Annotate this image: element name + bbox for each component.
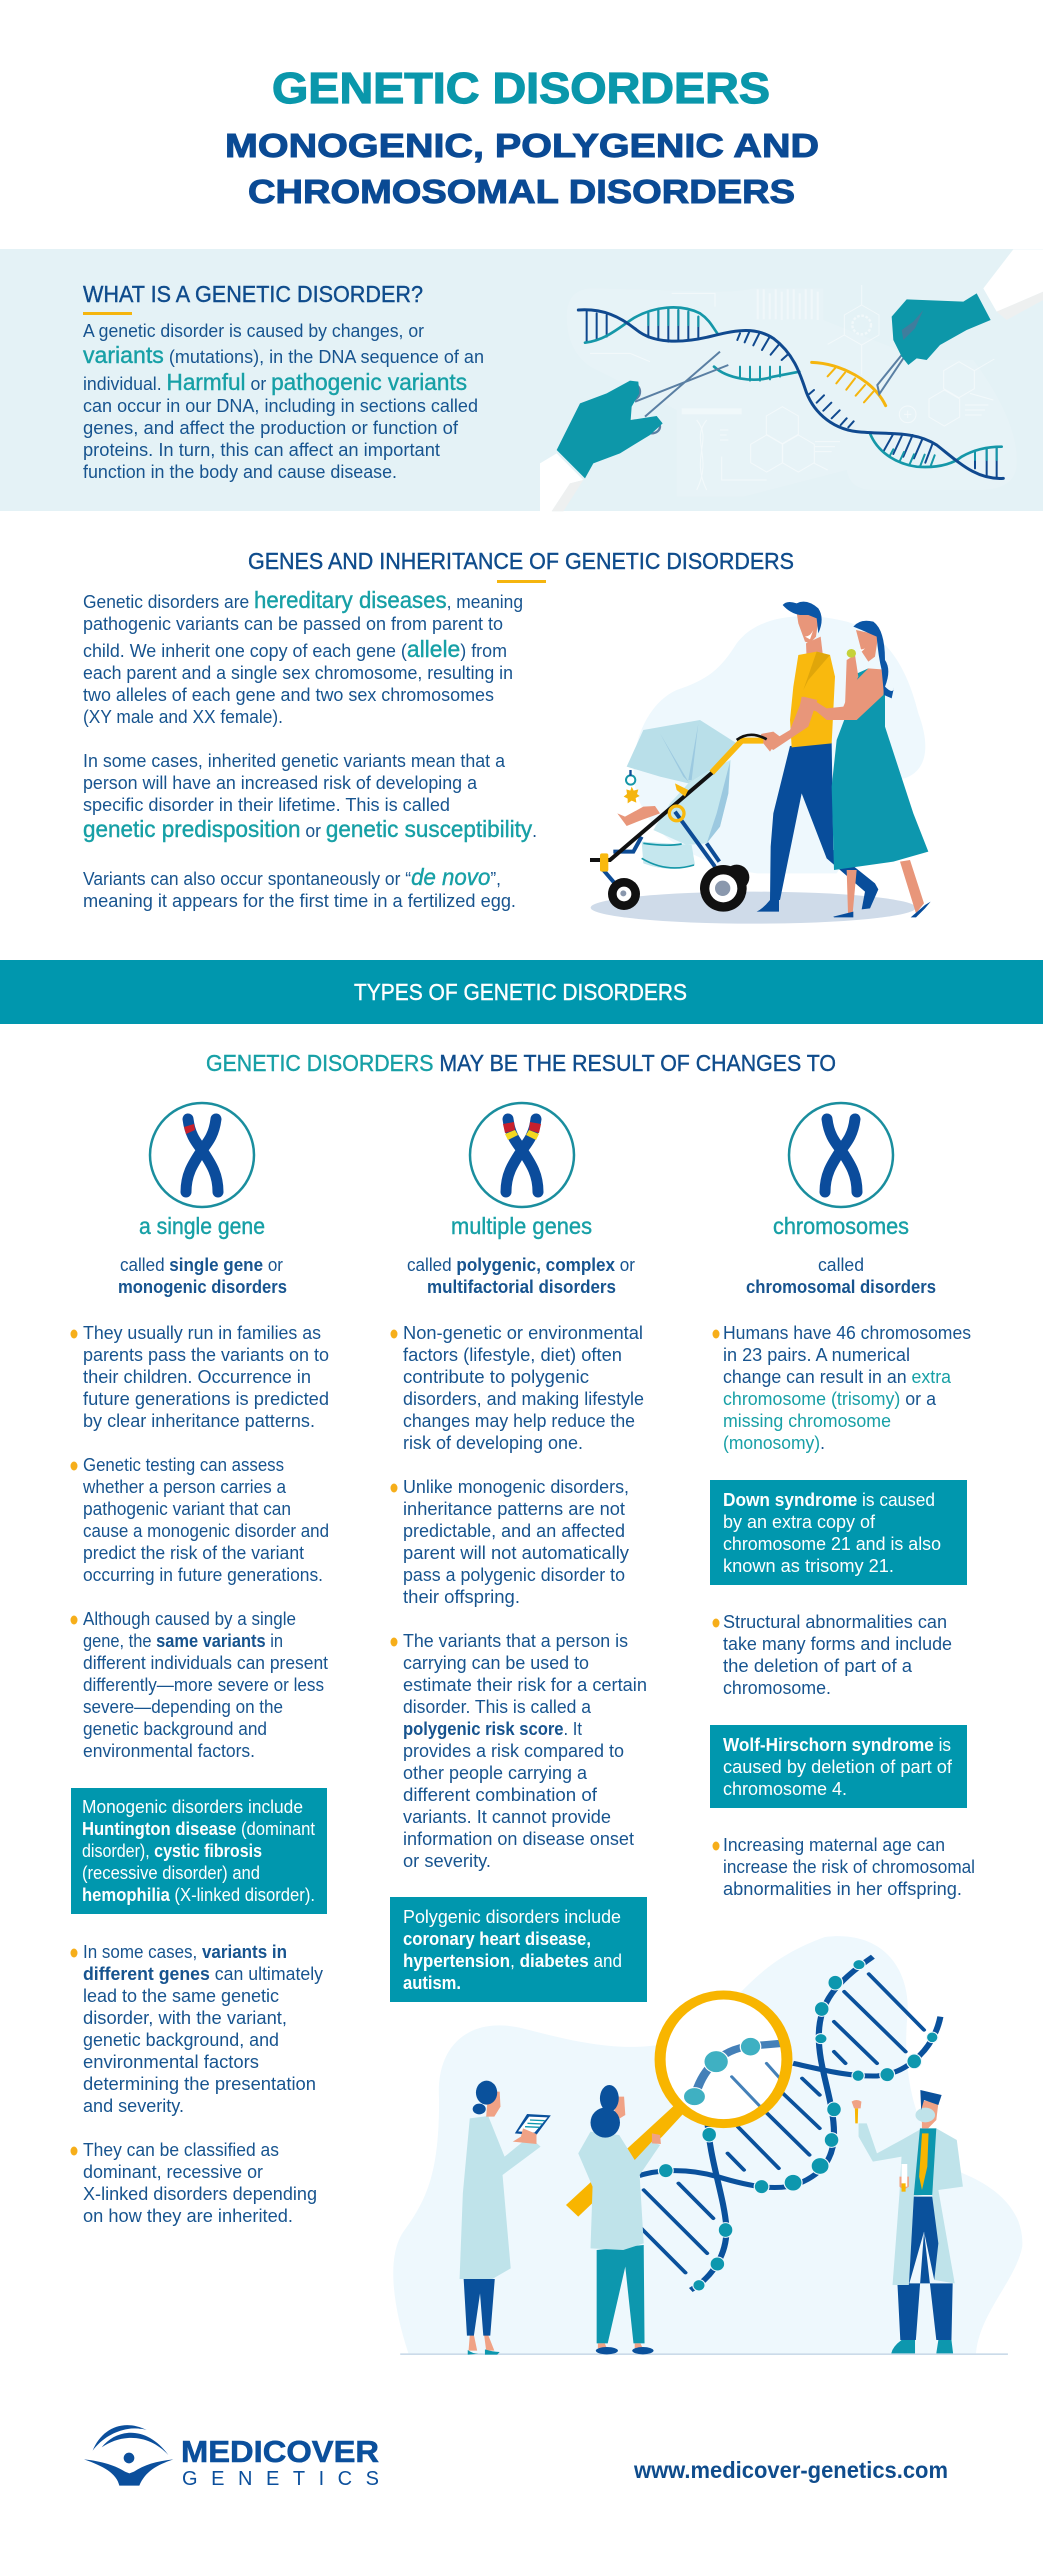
- text block: definition: individual. Harmful or pathogenic variants: [83, 369, 467, 395]
- bullet list: monogenic facts 1-3: future generations is predicted: [83, 1389, 329, 1409]
- bullet list: polygenic facts: Unlike monogenic disorders,: [403, 1477, 629, 1497]
- bullet list: polygenic facts: information on disease onset: [403, 1829, 634, 1849]
- text block: genes and inheritance: meaning it appears for the first time in a fertilized egg.: [83, 891, 516, 911]
- background blob: [634, 616, 925, 873]
- bullet: maternal age: increase the risk of chromosomal: [723, 1857, 975, 1877]
- bullet list: polygenic facts: predictable, and an affected: [403, 1521, 625, 1541]
- panel: what is a genetic disorder: [0, 249, 1043, 511]
- bullet list: polygenic facts: variants. It cannot provide: [403, 1807, 611, 1827]
- bullet list: polygenic facts: risk of developing one.: [403, 1433, 583, 1453]
- text block: definition: [83, 321, 484, 482]
- DNA beads: [627, 1960, 938, 2291]
- bullet: numerical change: missing chromosome: [723, 1411, 891, 1431]
- callout: down syndrome: Down syndrome is caused: [723, 1490, 935, 1510]
- callout: monogenic disorders: disorder), cystic fibrosis: [82, 1841, 262, 1861]
- icon: chromosome with one red band: [150, 1103, 254, 1207]
- bullet list: polygenic facts: changes may help reduce the: [403, 1411, 635, 1431]
- bullet list: monogenic facts 1-3: environmental factors.: [83, 1741, 255, 1761]
- bullet list: polygenic facts: provides a risk compared to: [403, 1741, 624, 1761]
- callout: monogenic disorders: Monogenic disorders include: [82, 1797, 303, 1817]
- bullet: structural abnormalities: the deletion of part of a: [723, 1656, 913, 1676]
- bullet: numerical change: in 23 pairs. A numerical: [723, 1345, 910, 1365]
- bullet list: monogenic facts 4-5: They can be classified as: [83, 2140, 279, 2160]
- bullet: numerical change: change can result in an extra: [723, 1367, 952, 1387]
- scientist with magnifying glass: [578, 2085, 661, 2354]
- bullet list: polygenic facts: other people carrying a: [403, 1763, 588, 1783]
- icon: plain chromosome: [789, 1103, 893, 1207]
- bullet list: monogenic facts 1-3: Although caused by a single: [83, 1609, 296, 1629]
- bullet list: monogenic facts 1-3: parents pass the variants on to: [83, 1345, 329, 1365]
- logo: Medicover Genetics: GENETICS: [182, 2468, 379, 2490]
- band: types of genetic disorders: TYPES OF GENETIC DISORDERS: [354, 979, 687, 1005]
- bullet: numerical change: chromosome (trisomy) or a: [723, 1389, 937, 1409]
- bullet list: monogenic facts 4-5: X-linked disorders depending: [83, 2184, 317, 2204]
- bullet list: monogenic facts 4-5: In some cases, variants in: [83, 1942, 287, 1962]
- wordmark: MEDICOVER: [181, 2434, 379, 2469]
- illustration: gloved hands editing DNA: [540, 249, 1043, 511]
- icon: logo mark: [84, 2425, 173, 2486]
- bullet list: monogenic facts 1-3: whether a person carries a: [82, 1477, 287, 1497]
- bullet list: polygenic facts: polygenic risk score. It: [403, 1719, 582, 1739]
- callout: monogenic disorders: hemophilia (X-linked disorder).: [82, 1885, 315, 1905]
- heading: may be the result of changes to: GENETIC DISORDERS MAY BE THE RESULT OF CHANGES TO: [206, 1050, 836, 1076]
- subtitle: chromosomal disorders: [746, 1255, 936, 1297]
- bullet: structural abnormalities: Structural abnormalities can: [723, 1612, 947, 1632]
- text block: genes and inheritance: (XY male and XX female).: [83, 707, 283, 727]
- bullet list: polygenic facts: [390, 1323, 647, 1871]
- text block: genes and inheritance: specific disorder in their lifetime. This is called: [83, 795, 450, 815]
- text block: genes and inheritance: each parent and a single sex chromosome, resulting in: [83, 663, 513, 683]
- bullet list: polygenic facts: factors (lifestyle, diet) often: [403, 1345, 622, 1365]
- callout: polygenic disorders: Polygenic disorders include: [403, 1907, 621, 1927]
- bullet list: monogenic facts 1-3: They usually run in families as: [83, 1323, 321, 1343]
- bullet list: monogenic facts 1-3: predict the risk of the variant: [83, 1543, 304, 1563]
- text block: genes and inheritance: person will have an increased risk of developing a: [83, 773, 478, 793]
- subtitle: polygenic, complex or multifactorial: [407, 1255, 635, 1297]
- stroller: [590, 720, 767, 912]
- icon: tweezers and right glove: [877, 293, 991, 394]
- subtitle: polygenic, complex or multifactorial: multifactorial disorders: [427, 1277, 616, 1297]
- bullet list: monogenic facts 1-3: cause a monogenic disorder and: [83, 1521, 329, 1541]
- callout: down syndrome: [710, 1480, 967, 1585]
- callout: wolf-hirschorn syndrome: caused by deletion of part of: [723, 1757, 953, 1777]
- bullet list: monogenic facts 1-3: differently—more severe or less: [83, 1675, 324, 1695]
- text block: definition: A genetic disorder is caused by changes, or: [83, 321, 424, 341]
- callout: wolf-hirschorn syndrome: Wolf-Hirschorn syndrome is: [723, 1735, 951, 1755]
- subtitle: chromosomal disorders: chromosomal disorders: [746, 1277, 936, 1297]
- bullet: maternal age: abnormalities in her offspring.: [723, 1879, 962, 1899]
- bullet list: polygenic facts: The variants that a person is: [403, 1631, 628, 1651]
- bullet list: monogenic facts 1-3: different individuals can present: [83, 1653, 328, 1673]
- woman's far leg and man: [757, 602, 878, 912]
- callout: down syndrome: by an extra copy of: [723, 1512, 876, 1532]
- subtitle: polygenic, complex or multifactorial: called polygenic, complex or: [407, 1255, 635, 1275]
- callout: monogenic disorders: Huntington disease (dominant: [82, 1819, 315, 1839]
- bullet list: monogenic facts 1-3: occurring in future generations.: [83, 1565, 323, 1585]
- woman: [800, 621, 931, 917]
- bullet list: monogenic facts 1-3: Genetic testing can assess: [83, 1455, 284, 1475]
- callout: polygenic disorders: autism.: [403, 1973, 461, 1993]
- background blob: [393, 1936, 1022, 2353]
- icon: chromosome with red and yellow bands: [470, 1103, 574, 1207]
- bullet list: polygenic facts: Non-genetic or environmental: [403, 1323, 643, 1343]
- text block: definition: variants (mutations), in the DNA sequence of an: [83, 342, 484, 368]
- sleeves: [540, 249, 1043, 511]
- text block: genes and inheritance: Variants can also occur spontaneously or “de novo”,: [83, 864, 501, 890]
- heading: genes and inheritance: GENES AND INHERITANCE OF GENETIC DISORDERS: [248, 548, 794, 574]
- illustration: scientists examining DNA with magnifying glass: [393, 1936, 1022, 2355]
- bullet list: polygenic facts: disorders, and making lifestyle: [403, 1389, 644, 1409]
- bullet list: polygenic facts: estimate their risk for a certain: [403, 1675, 647, 1695]
- bullet list: monogenic facts 1-3: genetic background and: [83, 1719, 267, 1739]
- subtitle: single gene or monogenic: called single gene or: [120, 1255, 283, 1275]
- text block: genes and inheritance: two alleles of each gene and two sex chromosomes: [83, 685, 494, 705]
- callout: monogenic disorders: (recessive disorder) and: [82, 1863, 260, 1883]
- bullet list: polygenic facts: their offspring.: [403, 1587, 520, 1607]
- bullet: numerical change: Humans have 46 chromosomes: [723, 1323, 971, 1343]
- callout: wolf-hirschorn syndrome: [710, 1725, 967, 1808]
- bullet list: monogenic facts 1-3: severe—depending on the: [83, 1697, 283, 1717]
- bullet list: polygenic facts: carrying can be used to: [403, 1653, 589, 1673]
- bullet list: monogenic facts 1-3: by clear inheritance patterns.: [83, 1411, 315, 1431]
- bullet list: monogenic facts 1-3: their children. Occurrence in: [83, 1367, 311, 1387]
- bullet list: polygenic facts: contribute to polygenic: [403, 1367, 589, 1387]
- bullet: structural abnormalities: [712, 1612, 952, 1698]
- bullet: structural abnormalities: chromosome.: [723, 1678, 831, 1698]
- bullet: numerical change: (monosomy).: [723, 1433, 825, 1453]
- website url: www.medicover-genetics.com: [633, 2457, 948, 2483]
- bullet list: polygenic facts: or severity.: [403, 1851, 491, 1871]
- text block: definition: function in the body and cause disease.: [83, 462, 397, 482]
- bullet list: monogenic facts 4-5: different genes can ultimately: [83, 1964, 323, 1984]
- bullet list: monogenic facts 4-5: on how they are inherited.: [83, 2206, 293, 2226]
- subtitle: chromosomal disorders: called: [818, 1255, 864, 1275]
- text block: genes and inheritance: In some cases, inherited genetic variants mean that a: [83, 751, 506, 771]
- label: multiple genes: multiple genes: [451, 1213, 592, 1239]
- bullet list: monogenic facts 1-3: [70, 1323, 329, 1761]
- callout: polygenic disorders: coronary heart disease,: [403, 1929, 591, 1949]
- text block: definition: genes, and affect the production or function of: [83, 418, 459, 438]
- callout: polygenic disorders: [390, 1897, 647, 2002]
- magnifier handle: [566, 2103, 687, 2217]
- text block: definition: can occur in our DNA, including in sections called: [83, 396, 478, 416]
- column: chromosomes: [710, 1103, 975, 1899]
- column: a single gene: [70, 1103, 329, 2226]
- bullet: maternal age: [712, 1835, 975, 1899]
- callout: monogenic disorders: [71, 1788, 327, 1914]
- icon: scissors and left glove: [557, 352, 728, 478]
- text block: genes and inheritance: Genetic disorders are hereditary diseases, meaning: [83, 587, 523, 613]
- bullet: structural abnormalities: take many forms and include: [723, 1634, 952, 1654]
- callout: polygenic disorders: hypertension, diabetes and: [403, 1951, 622, 1971]
- scientist with test tube: [852, 2090, 963, 2353]
- heading: what is a genetic disorder: WHAT IS A GENETIC DISORDER?: [83, 281, 423, 307]
- DNA strands: [578, 307, 1003, 478]
- subtitle line 2: CHROMOSOMAL DISORDERS: [248, 173, 795, 210]
- text block: definition: proteins. In turn, this can affect an important: [83, 440, 440, 460]
- logo: Medicover Genetics: [84, 2425, 379, 2490]
- bullet: numerical change: [712, 1323, 971, 1453]
- subtitle line 1: MONOGENIC, POLYGENIC AND: [225, 127, 819, 164]
- bullet list: monogenic facts 4-5: environmental factors: [83, 2052, 259, 2072]
- scientist with clipboard: [460, 2081, 551, 2355]
- ground shadow: [591, 892, 916, 924]
- callout: down syndrome: known as trisomy 21.: [723, 1556, 894, 1576]
- subtitle: single gene or monogenic: [118, 1255, 287, 1297]
- bullet list: monogenic facts 4-5: and severity.: [83, 2096, 184, 2116]
- subtitle: single gene or monogenic: monogenic disorders: [118, 1277, 287, 1297]
- title block: [225, 64, 819, 210]
- text block: genes and inheritance: [83, 587, 537, 911]
- bullet: maternal age: Increasing maternal age can: [723, 1835, 945, 1855]
- bullet list: polygenic facts: inheritance patterns are not: [403, 1499, 625, 1519]
- bullet list: polygenic facts: parent will not automatically: [403, 1543, 629, 1563]
- text block: genes and inheritance: child. We inherit one copy of each gene (allele) from: [83, 636, 507, 662]
- bullet list: monogenic facts 1-3: gene, the same variants in: [83, 1631, 283, 1651]
- band: types of genetic disorders: [0, 960, 1043, 1024]
- label: chromosomes: chromosomes: [773, 1213, 909, 1239]
- illustration: family with stroller: [590, 602, 931, 924]
- magnifier lens: [660, 1995, 787, 2124]
- floor line: [400, 2353, 1008, 2355]
- main title: GENETIC DISORDERS: [272, 64, 770, 113]
- column: multiple genes: [390, 1103, 647, 2002]
- bullet list: polygenic facts: pass a polygenic disorder to: [403, 1565, 625, 1585]
- text block: genes and inheritance: genetic predisposition or genetic susceptibility.: [83, 816, 537, 842]
- bullet list: monogenic facts 4-5: dominant, recessive or: [83, 2162, 263, 2182]
- bullet list: monogenic facts 4-5: determining the presentation: [83, 2074, 316, 2094]
- text block: genes and inheritance: pathogenic variants can be passed on from parent to: [83, 614, 503, 634]
- DNA helix: [631, 1957, 940, 2290]
- bullet list: polygenic facts: different combination of: [403, 1785, 598, 1805]
- bullet list: monogenic facts 4-5: genetic background, and: [83, 2030, 279, 2050]
- bullet list: polygenic facts: disorder. This is called a: [403, 1697, 592, 1717]
- bullet list: monogenic facts 4-5: [70, 1942, 323, 2226]
- label: a single gene: a single gene: [139, 1213, 265, 1239]
- bullet list: monogenic facts 4-5: disorder, with the variant,: [83, 2008, 287, 2028]
- bullet list: monogenic facts 1-3: pathogenic variant that can: [83, 1499, 291, 1519]
- callout: wolf-hirschorn syndrome: chromosome 4.: [723, 1779, 847, 1799]
- bullet list: monogenic facts 4-5: lead to the same genetic: [83, 1986, 279, 2006]
- callout: down syndrome: chromosome 21 and is also: [723, 1534, 941, 1554]
